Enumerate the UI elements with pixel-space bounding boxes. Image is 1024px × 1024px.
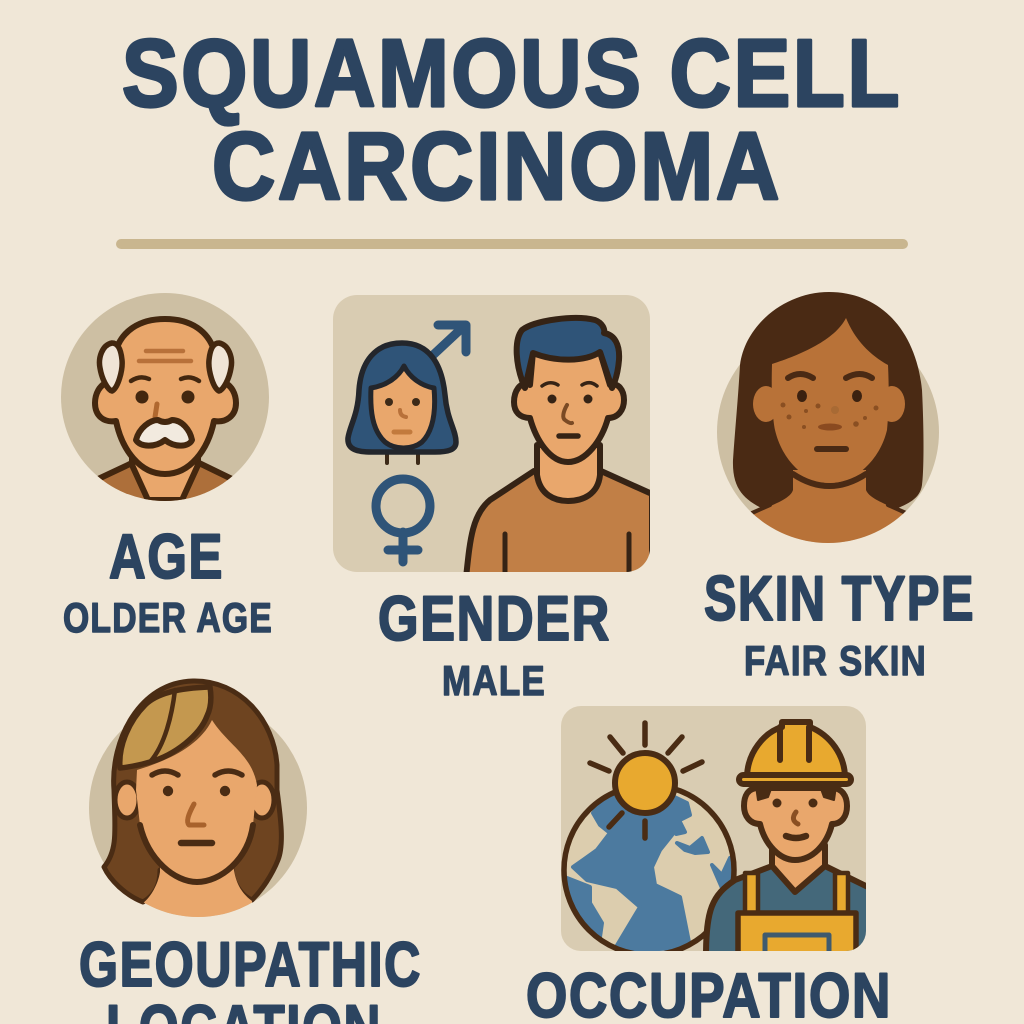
- label: male: MALE: [442, 657, 546, 704]
- heading: geoupathic location: GEOUPATHIC: [79, 930, 422, 1000]
- heading: gender: GENDER: [378, 584, 611, 654]
- label: older age: OLDER AGE: [63, 594, 273, 641]
- icon: globe: [560, 785, 735, 955]
- icon: woman head: [348, 343, 456, 463]
- heading: age: AGE: [109, 522, 224, 592]
- title: SQUAMOUS CELL: [122, 20, 902, 127]
- icon: female symbol: [388, 532, 418, 562]
- icon: sun, globe and worker: [560, 706, 870, 959]
- icon: woman with highlighted hair: [89, 681, 307, 925]
- heading: geoupathic location: [79, 930, 422, 1024]
- icon: sun: [590, 723, 702, 838]
- panel: occupation: [526, 706, 892, 1024]
- icon: older man: [61, 293, 269, 515]
- icon: fair skin woman: [717, 292, 939, 550]
- icon: construction worker: [706, 722, 870, 959]
- label: fair skin: FAIR SKIN: [744, 637, 927, 684]
- icon: male symbol: [432, 325, 466, 356]
- panel: geographic location: [79, 681, 422, 1024]
- title: CARCINOMA: [212, 113, 782, 220]
- panel: skin type: [704, 292, 975, 684]
- icon: gender illustration: [333, 295, 652, 578]
- title: [122, 20, 902, 220]
- panel: gender: [333, 295, 652, 704]
- icon: man: [466, 318, 652, 578]
- freckles: [780, 402, 878, 429]
- panel: age: [61, 293, 273, 641]
